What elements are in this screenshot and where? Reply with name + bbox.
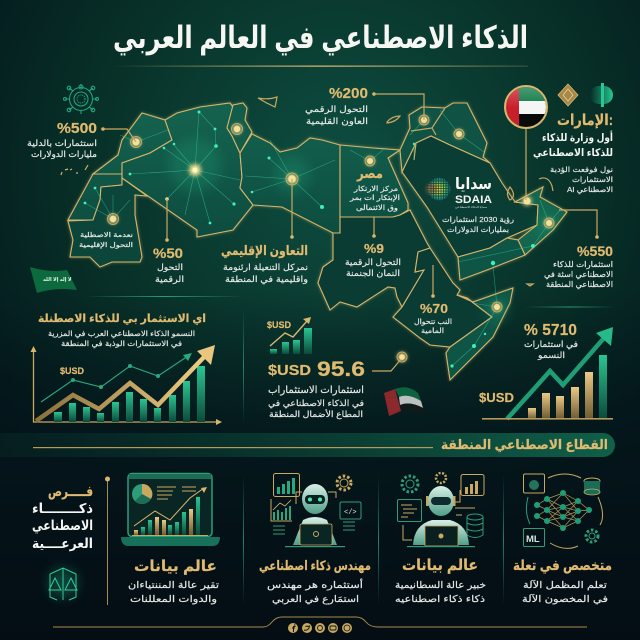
- callout: regional cooperation: [221, 179, 308, 284]
- panel: machine learning specialist: [513, 474, 612, 605]
- description: المطاع الأضمال المنطقة: [269, 409, 363, 419]
- panel: data scientist laptop: عالم بيانات: [134, 558, 217, 575]
- panel: data scientist robot: ذكاء ذكاء اصطناعيه: [395, 594, 485, 605]
- panel: growth chart 5710: في استثمارات: [524, 339, 578, 349]
- callout: 9 percent: التحول الرقمية: [345, 257, 401, 267]
- callout: 9 percent: النمان الجنمنة: [346, 268, 400, 278]
- green arrow: [507, 327, 613, 419]
- mini bar chart: $USD: [267, 320, 291, 330]
- callout: Egypt: الإبتكار ات بمر: [349, 194, 400, 202]
- callout: 550 percent: %550: [577, 243, 613, 259]
- social icons: [288, 623, 352, 633]
- panel: growth chart 5710: $USD: [479, 390, 514, 405]
- callout: 550 percent: استثمارات للذكاء: [553, 260, 613, 269]
- icon: Saudi flag: [30, 267, 77, 293]
- callout: 200 percent: التحول الرقمي: [305, 104, 368, 114]
- SDAIA logo: سدايا: [455, 176, 492, 193]
- map label: Mauritania: [79, 232, 133, 249]
- callout: 200 percent: [305, 85, 424, 126]
- map label: Mauritania: التحول الإقليمية: [79, 242, 133, 249]
- panel: AI engineer: أستثماره هر مهندس: [267, 578, 363, 591]
- panel: opportunities heading: الاصطناعي: [32, 518, 93, 533]
- title: الذكاء الاصطناعي في العالم العربي: [113, 20, 528, 56]
- soft region glows: [169, 139, 555, 322]
- icon: Saudi flag: لا إله إلا الله: [43, 277, 72, 283]
- callout: 70 percent: المامية: [421, 328, 444, 335]
- chart heading: في الاستثمارات الوذبة في المنطقة: [61, 339, 182, 348]
- icon: circuit gear: [64, 84, 98, 114]
- bars: [54, 366, 205, 422]
- SDAIA logo: بمليارات الدولارات: [447, 225, 509, 234]
- callout: UAE: أول وزارة للذكاء: [542, 130, 613, 144]
- SDAIA logo: SDAIA: [455, 194, 492, 206]
- callout: UAE: للذكاء الاصطناعي: [533, 147, 613, 159]
- callout: 550 percent: [544, 210, 613, 289]
- SDAIA logo: رؤية 2030 استثمارات: [442, 215, 514, 224]
- panel: AI engineer: استمَارع في العربي: [272, 594, 359, 605]
- figure: $USD: [268, 362, 311, 379]
- SDAIA logo: سدايا الذكاء الاصطناعي: [455, 206, 487, 209]
- callout: UAE: نول فوفعت الؤدبة: [550, 165, 613, 174]
- column dividers: [243, 475, 504, 605]
- callout: 50 percent: %50: [153, 245, 183, 261]
- panel: AI engineer: مهندس ذكاء اصطناعي: [259, 558, 371, 573]
- icon: neural network: ML: [526, 534, 540, 545]
- callout: UAE: [533, 112, 613, 194]
- callout: 50 percent: التحول: [157, 262, 183, 272]
- green trend line: [41, 353, 192, 402]
- panel: data scientist robot: عالم بيانات: [402, 557, 478, 574]
- callout: 50 percent: الرقمية: [155, 274, 184, 284]
- callout: 9 percent: %9: [364, 241, 384, 256]
- chart heading: اي الاستثمار بي للذكاء الاصطنلة: [38, 313, 206, 325]
- chart heading: النسمو الذكاء الاصطناعي العرب في المزرية: [48, 329, 195, 338]
- panel: data scientist laptop: [121, 474, 220, 605]
- callout: 500 percent: [27, 120, 136, 159]
- callout: 200 percent: العاون القليمية: [306, 116, 368, 126]
- icon: robot engineer: </>: [344, 509, 357, 517]
- icon: scales: [48, 568, 78, 600]
- icon: gold diamond with green arrow: [558, 83, 613, 107]
- callout: 550 percent: الاصطناعي المنطقة: [546, 280, 613, 289]
- network lines: [85, 110, 560, 366]
- section heading bar: [0, 433, 615, 457]
- description: في الذكاء الاصطناعي في: [268, 398, 364, 408]
- gold bars: [528, 372, 593, 419]
- map of the Arab world: [61, 97, 567, 380]
- gold trend arrow: [36, 345, 215, 421]
- callout: 70 percent: %70: [420, 301, 448, 316]
- callout: 9 percent: [345, 217, 401, 278]
- panel: data scientist robot: [395, 473, 486, 605]
- description: استثمارات الاستثماراب: [268, 385, 364, 396]
- callout: Egypt: [349, 165, 400, 212]
- mini bar chart: [267, 317, 312, 354]
- panel: data scientist laptop: والدوات المعللنات: [130, 594, 217, 605]
- panel: machine learning specialist: تعلم المظمل الآلة: [523, 579, 607, 591]
- canary islands: [61, 165, 88, 175]
- callout: 500 percent: استثمارات بالدلية: [27, 138, 97, 148]
- callout: UAE: الإمارات:: [557, 112, 613, 129]
- panel: opportunities heading: [32, 476, 110, 605]
- panel: opportunities heading: ذكــــــــاء: [32, 501, 93, 516]
- callout: UAE: AI الاصطناعي: [567, 185, 613, 194]
- map label: Mauritania: نعدمة الاصطلية: [80, 232, 133, 239]
- panel: opportunities heading: العرعــــية: [32, 536, 93, 551]
- panel: investment line chart: [30, 313, 222, 425]
- icon: laptop dashboard: [121, 474, 220, 546]
- callout: regional cooperation: نمركل التنعيلة ارئنومة: [223, 262, 308, 272]
- panel: data scientist laptop: تقير عالة المننتياءان: [128, 580, 219, 591]
- callout: regional cooperation: واقليمية في المنطقة: [225, 274, 308, 284]
- panel: 95.6 USD investment: [267, 317, 424, 419]
- panel: growth chart 5710: [479, 322, 613, 420]
- panel: data scientist robot: خبير عالة السطانيمية: [395, 580, 486, 591]
- callout: 500 percent: مليارات الدولارات: [31, 149, 97, 159]
- SDAIA logo: [427, 176, 514, 234]
- chart axes: [34, 352, 216, 422]
- inner borders: [411, 108, 445, 160]
- callout: regional cooperation: التعاون الإقليمي: [221, 243, 308, 258]
- section heading bar: القطاع الاصطناعي المنطقة: [441, 437, 608, 452]
- islands: [258, 97, 553, 286]
- footer line: [53, 617, 587, 627]
- panel: AI engineer: [259, 474, 371, 605]
- panel: growth chart 5710: النسمو: [537, 350, 565, 360]
- UAE flag badge: [505, 86, 547, 200]
- icon: UAE flag waving: [384, 387, 424, 416]
- panel: growth chart 5710: % 5710: [524, 322, 577, 339]
- axis label: $USD: [60, 366, 84, 376]
- panel: machine learning specialist: في المخصون الآلة: [522, 593, 608, 605]
- callout: 550 percent: الاصطناعي اسثة في: [544, 270, 613, 279]
- map regions: [68, 103, 567, 380]
- callout: Egypt: مصر: [356, 165, 383, 182]
- callout: 70 percent: النب تتحوال: [414, 319, 452, 326]
- callout: UAE: الاستثمارات: [572, 175, 613, 184]
- callout: 50 percent: [153, 199, 184, 284]
- vertical rule: [105, 476, 110, 605]
- chart heading: [38, 313, 206, 348]
- callout: 200 percent: %200: [329, 85, 368, 102]
- figure: [268, 358, 365, 381]
- map nodes: [84, 110, 554, 368]
- callout: Egypt: مركز الارتكار: [353, 185, 398, 193]
- panel: opportunities heading: فـــــرص: [48, 483, 93, 500]
- figure: 95.6: [317, 358, 365, 381]
- panel: machine learning specialist: متخصص في تعلة: [513, 557, 612, 574]
- callout: Egypt: وق الائتمالى: [356, 205, 398, 212]
- callout: 500 percent: %500: [57, 120, 97, 137]
- icon: robot data scientist: [398, 473, 484, 547]
- description: [268, 385, 364, 419]
- dividers: [85, 296, 615, 424]
- connector: [372, 352, 407, 371]
- callout: 70 percent: [414, 265, 452, 335]
